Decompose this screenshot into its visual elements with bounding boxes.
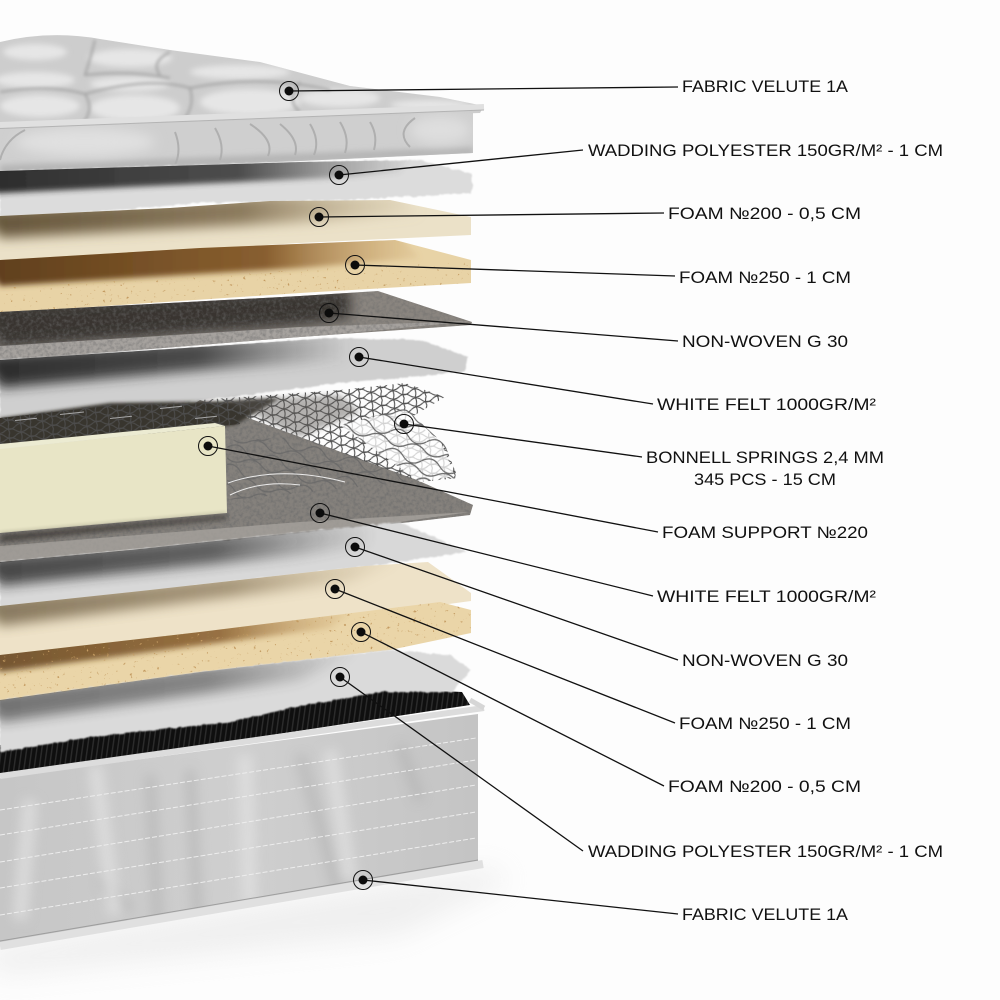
black spring base <box>0 688 470 776</box>
labels: NON-WOVEN G 30 <box>682 333 848 351</box>
labels <box>588 78 943 924</box>
layer: foam 250 top <box>0 235 471 313</box>
labels: FOAM №250 - 1 CM <box>679 269 851 287</box>
layer: foam 250 bottom <box>0 602 471 701</box>
labels: WADDING POLYESTER 150GR/M² - 1 CM <box>588 142 943 160</box>
labels: WHITE FELT 1000GR/M² <box>657 396 877 414</box>
layer: fabric velute bottom <box>0 700 484 946</box>
layer: wadding polyester bottom <box>0 650 471 752</box>
labels: FOAM SUPPORT №220 <box>662 524 868 542</box>
layer: white felt top <box>0 335 468 420</box>
labels: FOAM №200 - 0,5 CM <box>668 778 861 796</box>
labels: WADDING POLYESTER 150GR/M² - 1 CM <box>588 843 943 861</box>
labels: WHITE FELT 1000GR/M² <box>657 588 877 606</box>
labels: FOAM №250 - 1 CM <box>679 715 851 733</box>
bonnell springs <box>0 383 458 500</box>
floor shadow <box>0 868 510 975</box>
layer: foam 200 bottom <box>0 560 471 656</box>
layer: foam support <box>0 423 227 542</box>
layer: fabric velute top <box>0 35 484 175</box>
layer: wadding polyester top <box>0 159 474 216</box>
leader lines and markers <box>198 82 678 914</box>
labels: FOAM №200 - 0,5 CM <box>668 205 861 223</box>
layer: non-woven top <box>0 290 472 362</box>
layer: non-woven middle <box>0 400 473 563</box>
layer: foam 200 top <box>0 195 471 261</box>
labels: FABRIC VELUTE 1A <box>682 78 848 96</box>
labels: 345 PCS - 15 CM <box>694 471 836 489</box>
layer: white felt middle <box>0 522 467 608</box>
labels: NON-WOVEN G 30 <box>682 652 848 670</box>
labels: BONNELL SPRINGS 2,4 MM <box>646 449 884 467</box>
labels: FABRIC VELUTE 1A <box>682 906 848 924</box>
